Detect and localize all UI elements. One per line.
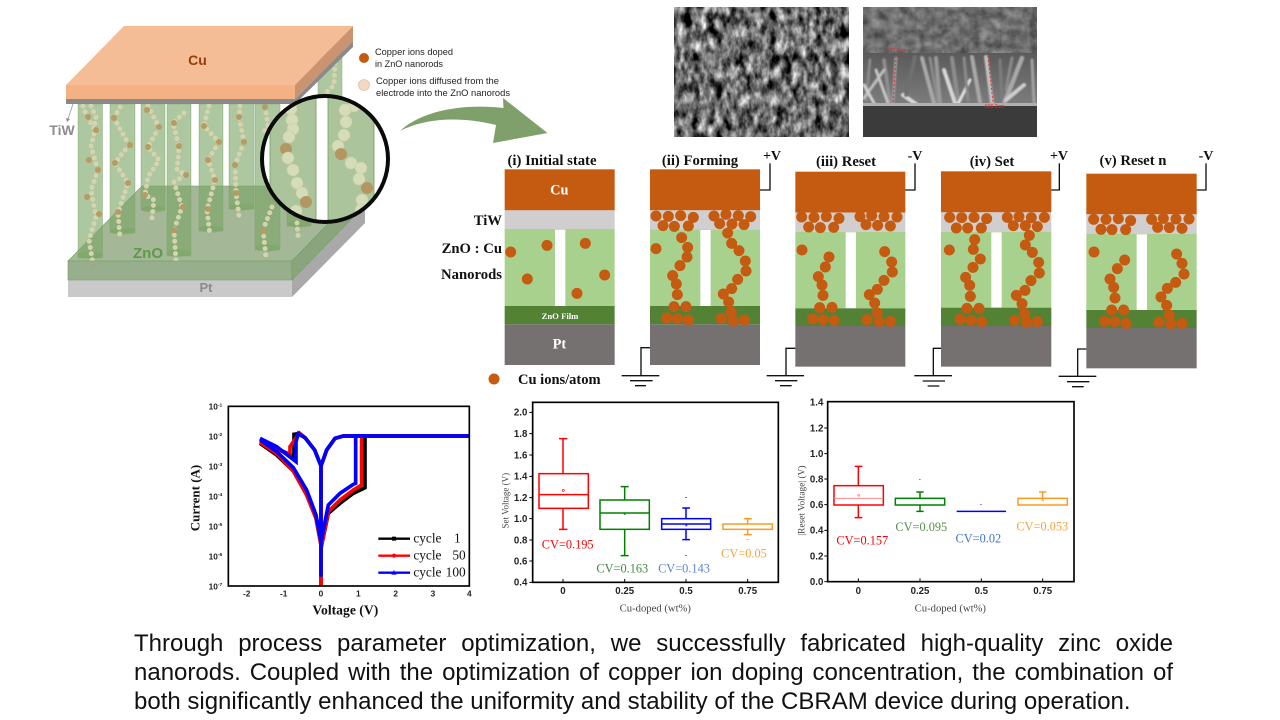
CV labels: CV=0.195 — [542, 537, 594, 551]
legend: cycles: 50 — [452, 548, 466, 563]
plot frame — [828, 402, 1074, 582]
chart: reset voltage box plot — [797, 398, 1074, 615]
legend: cycles: 1 — [454, 531, 461, 546]
y axis labels: 1.6 — [514, 450, 528, 461]
x axis labels: 0.5 — [975, 586, 989, 597]
x axis ticks: 3 — [431, 588, 436, 598]
x axis ticks: 0 — [319, 588, 324, 598]
plot frame — [228, 406, 469, 586]
heading: set: (iv) Set — [970, 154, 1014, 170]
legend: cycles: 100 — [446, 565, 466, 580]
box: 0 wt% — [834, 466, 883, 518]
legend: cycles — [378, 531, 466, 580]
y axis ticks: -3 — [218, 462, 223, 468]
axis title: reset voltage: |Reset Voltage| (V) — [797, 466, 808, 536]
legend: copper ion types: electrode into the ZnO nanorods — [376, 87, 510, 98]
legend: Cu ions/atom: Cu ions/atom — [518, 372, 601, 388]
heading: reset: (iii) Reset — [816, 154, 876, 170]
legend: copper ion types — [358, 46, 510, 98]
y axis labels: 0.4 — [810, 526, 824, 537]
y axis labels: 1.4 — [810, 398, 824, 409]
y axis labels: 1.0 — [810, 449, 823, 460]
Pt layer: Pt — [200, 280, 213, 295]
x axis labels: 0.25 — [911, 586, 930, 597]
axis title: Cu-doped: Cu-doped (wt%) — [915, 604, 986, 615]
CV labels: CV=0.163 — [596, 561, 648, 575]
CV labels: CV=0.143 — [658, 561, 710, 575]
y axis labels: 2.0 — [514, 408, 527, 419]
caption text block: both significantly enhanced the uniformity and stability of the CBRAM device during operation. — [134, 688, 1131, 715]
legend: cycles: cycle — [413, 565, 442, 580]
ZnO film top face — [68, 186, 365, 261]
curve: cycle 100 — [260, 434, 469, 577]
x axis labels — [560, 586, 758, 597]
y axis labels: 0.2 — [810, 551, 823, 562]
CV labels: CV=0.053 — [1016, 519, 1068, 533]
caption text block — [134, 630, 1174, 715]
box: 0.25 wt% — [600, 487, 649, 556]
axis ticks — [529, 412, 748, 582]
y axis labels: 1.4 — [514, 472, 528, 483]
y axis labels: 1.0 — [514, 514, 527, 525]
chart: I-V curves — [187, 402, 472, 618]
x axis ticks: 2 — [393, 588, 398, 598]
Cu top electrode: Cu — [188, 52, 207, 68]
axis title: current: Current (A) — [187, 465, 202, 531]
y axis labels: 1.8 — [514, 429, 528, 440]
x axis labels: 0 — [560, 586, 566, 597]
y axis labels — [810, 398, 824, 588]
caption text block: nanorods. Coupled with the optimization of copper ion doping concentration, the combination of — [134, 659, 1173, 686]
box: 0 wt% — [539, 439, 588, 529]
panel: set — [914, 163, 1059, 386]
y axis labels: 0.8 — [810, 474, 824, 485]
x axis ticks — [243, 588, 472, 598]
resistive switching panels — [441, 149, 1213, 388]
y axis ticks: 10 — [209, 521, 218, 531]
nanorods — [78, 104, 311, 258]
y axis ticks: -2 — [218, 432, 223, 438]
y axis labels: 0.6 — [514, 556, 528, 567]
CV labels — [542, 537, 767, 575]
panel: reset n — [1059, 163, 1206, 387]
CV labels: CV=0.05 — [721, 547, 767, 561]
voltage: +V: +V — [1050, 149, 1068, 164]
SEM image: cross section of nanorods: 617.2nm — [887, 48, 906, 54]
y axis labels: 0.6 — [810, 500, 824, 511]
y axis labels: 0.8 — [514, 535, 528, 546]
curved green arrow — [400, 98, 548, 143]
axis title: Cu-doped: Cu-doped (wt%) — [620, 604, 691, 615]
diffused copper bead chains — [83, 63, 335, 270]
3D device schematic — [49, 26, 388, 297]
x axis labels: 0.5 — [679, 586, 693, 597]
voltage: +V: +V — [763, 149, 781, 164]
y axis ticks: 10 — [209, 461, 218, 471]
y axis ticks: 10 — [209, 431, 218, 441]
caption text block: Through process parameter optimization, we successfully fabricated high-quality zinc oxide — [134, 630, 1173, 657]
x axis labels: 0.75 — [738, 586, 758, 597]
axis title: set voltage: Set Voltage (V) — [500, 473, 510, 528]
curve: cycle 50 — [260, 433, 469, 586]
Pt layer — [68, 205, 365, 297]
panel: initial state: Cu — [550, 182, 569, 198]
panel: initial state — [505, 169, 615, 365]
y axis ticks: 10 — [209, 551, 218, 561]
y axis ticks: -1 — [218, 402, 223, 408]
magnified view circle — [262, 95, 388, 225]
y axis labels: 1.2 — [810, 423, 823, 434]
axis title: voltage: Voltage (V) — [312, 602, 378, 618]
x axis ticks: 4 — [467, 588, 472, 598]
x axis ticks: 1 — [356, 588, 361, 598]
x axis labels: 0.75 — [1033, 586, 1053, 597]
SEM image: cross section of nanorods: 606.2nm — [985, 104, 1004, 110]
SEM image: cross section of nanorods — [863, 7, 1037, 137]
y axis labels: 0.0 — [810, 577, 823, 588]
heading: reset n: (v) Reset n — [1100, 153, 1166, 169]
box: 0.75 wt% — [723, 519, 772, 539]
layer labels — [441, 213, 502, 283]
x axis labels: 0 — [856, 586, 861, 597]
box: 0.5 wt% — [957, 505, 1006, 511]
TiW label with pointer — [49, 104, 75, 138]
x axis labels: 0.25 — [615, 586, 635, 597]
TiW label with pointer: TiW — [49, 122, 75, 138]
voltage: -V: -V — [908, 149, 922, 164]
curve: cycle 1 — [260, 434, 469, 586]
box: 0.25 wt% — [895, 479, 945, 511]
layer labels: Nanorods — [441, 267, 502, 283]
layer labels: ZnO : Cu — [442, 241, 502, 257]
SEM image: top view of nanorods — [674, 7, 849, 137]
panel: initial state: ZnO Film — [542, 311, 579, 321]
CV labels — [836, 519, 1068, 548]
panel: forming — [622, 163, 770, 386]
y axis labels: 0.4 — [514, 578, 528, 589]
plot frame — [533, 402, 778, 582]
axis ticks — [824, 428, 1043, 582]
x axis ticks: -2 — [243, 588, 251, 598]
y axis labels — [514, 408, 528, 589]
legend: copper ion types: Copper ions diffused from the — [376, 75, 499, 86]
CV labels: CV=0.157 — [836, 534, 888, 548]
CV labels: CV=0.02 — [956, 531, 1001, 545]
y axis ticks — [209, 402, 223, 591]
y axis labels: 1.2 — [514, 493, 527, 504]
Cu top electrode — [66, 26, 353, 104]
y axis ticks: -5 — [218, 522, 223, 528]
legend: copper ion types: Copper ions doped — [375, 46, 453, 57]
layer labels: TiW — [474, 213, 502, 229]
y axis ticks: 10 — [209, 581, 218, 591]
box: 0.5 wt% — [662, 497, 711, 555]
y axis ticks: 10 — [209, 402, 218, 412]
y axis ticks: -6 — [218, 552, 223, 558]
box: 0.75 wt% — [1018, 492, 1067, 505]
CV labels: CV=0.095 — [895, 520, 947, 534]
legend: cycles: cycle — [413, 548, 442, 563]
heading: initial state: (i) Initial state — [508, 153, 597, 169]
x axis ticks: -1 — [280, 588, 288, 598]
legend: copper ion types: in ZnO nanorods — [375, 58, 443, 69]
y axis ticks: -7 — [218, 582, 223, 588]
legend: cycles: cycle — [413, 531, 442, 546]
chart: set voltage box plot — [500, 402, 778, 615]
heading: forming: (ii) Forming — [662, 153, 739, 169]
panel: initial state: Pt — [553, 336, 566, 352]
x axis labels — [856, 586, 1053, 597]
voltage: -V: -V — [1199, 149, 1213, 164]
ZnO film front and side faces: ZnO — [133, 245, 163, 262]
ZnO film front and side faces — [68, 186, 365, 280]
y axis ticks: -4 — [218, 492, 223, 498]
panel: reset — [767, 163, 915, 386]
y axis ticks: 10 — [209, 491, 218, 501]
back nanorod — [318, 50, 342, 100]
